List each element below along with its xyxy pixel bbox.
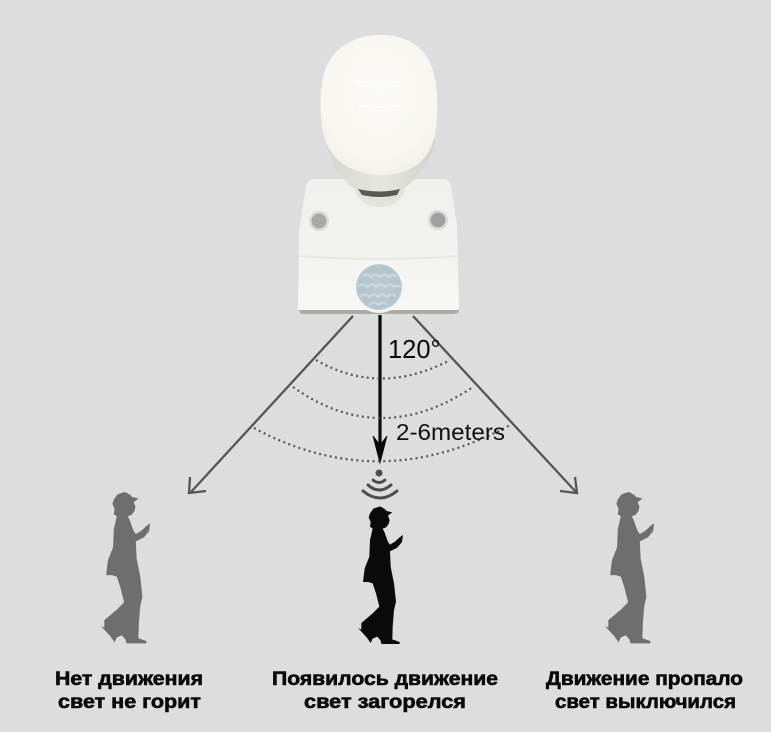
person left: no motion — [101, 492, 150, 643]
screw hole left — [309, 211, 329, 231]
bulb stem — [355, 190, 405, 207]
distance label: 2-6meters — [396, 419, 505, 445]
caption left: свет не горит — [58, 692, 201, 713]
right detection arrow — [413, 316, 577, 493]
bulb highlights — [357, 81, 402, 107]
caption right: Движение пропало — [546, 669, 743, 690]
lamp with motion sensor — [298, 35, 459, 314]
left detection arrow — [189, 316, 353, 493]
person right: motion gone — [605, 492, 654, 643]
caption center — [272, 669, 498, 713]
caption center: Появилось движение — [272, 669, 498, 690]
caption right: свет выключился — [555, 692, 736, 713]
person center: motion detected — [358, 506, 403, 644]
icon: motion signal — [363, 470, 397, 498]
dotted range arcs — [254, 360, 510, 461]
caption left — [55, 669, 203, 713]
socket collar — [358, 189, 400, 197]
bulb neck — [326, 140, 436, 192]
caption right — [546, 669, 743, 713]
PIR sensor lens — [353, 261, 405, 313]
screw hole right — [428, 210, 448, 230]
caption left: Нет движения — [55, 669, 203, 690]
mounting base plate — [298, 179, 459, 314]
center arrow — [373, 315, 387, 463]
caption center: свет загорелся — [304, 692, 466, 713]
angle label: 120° — [388, 336, 441, 364]
bulb dome — [320, 35, 437, 175]
